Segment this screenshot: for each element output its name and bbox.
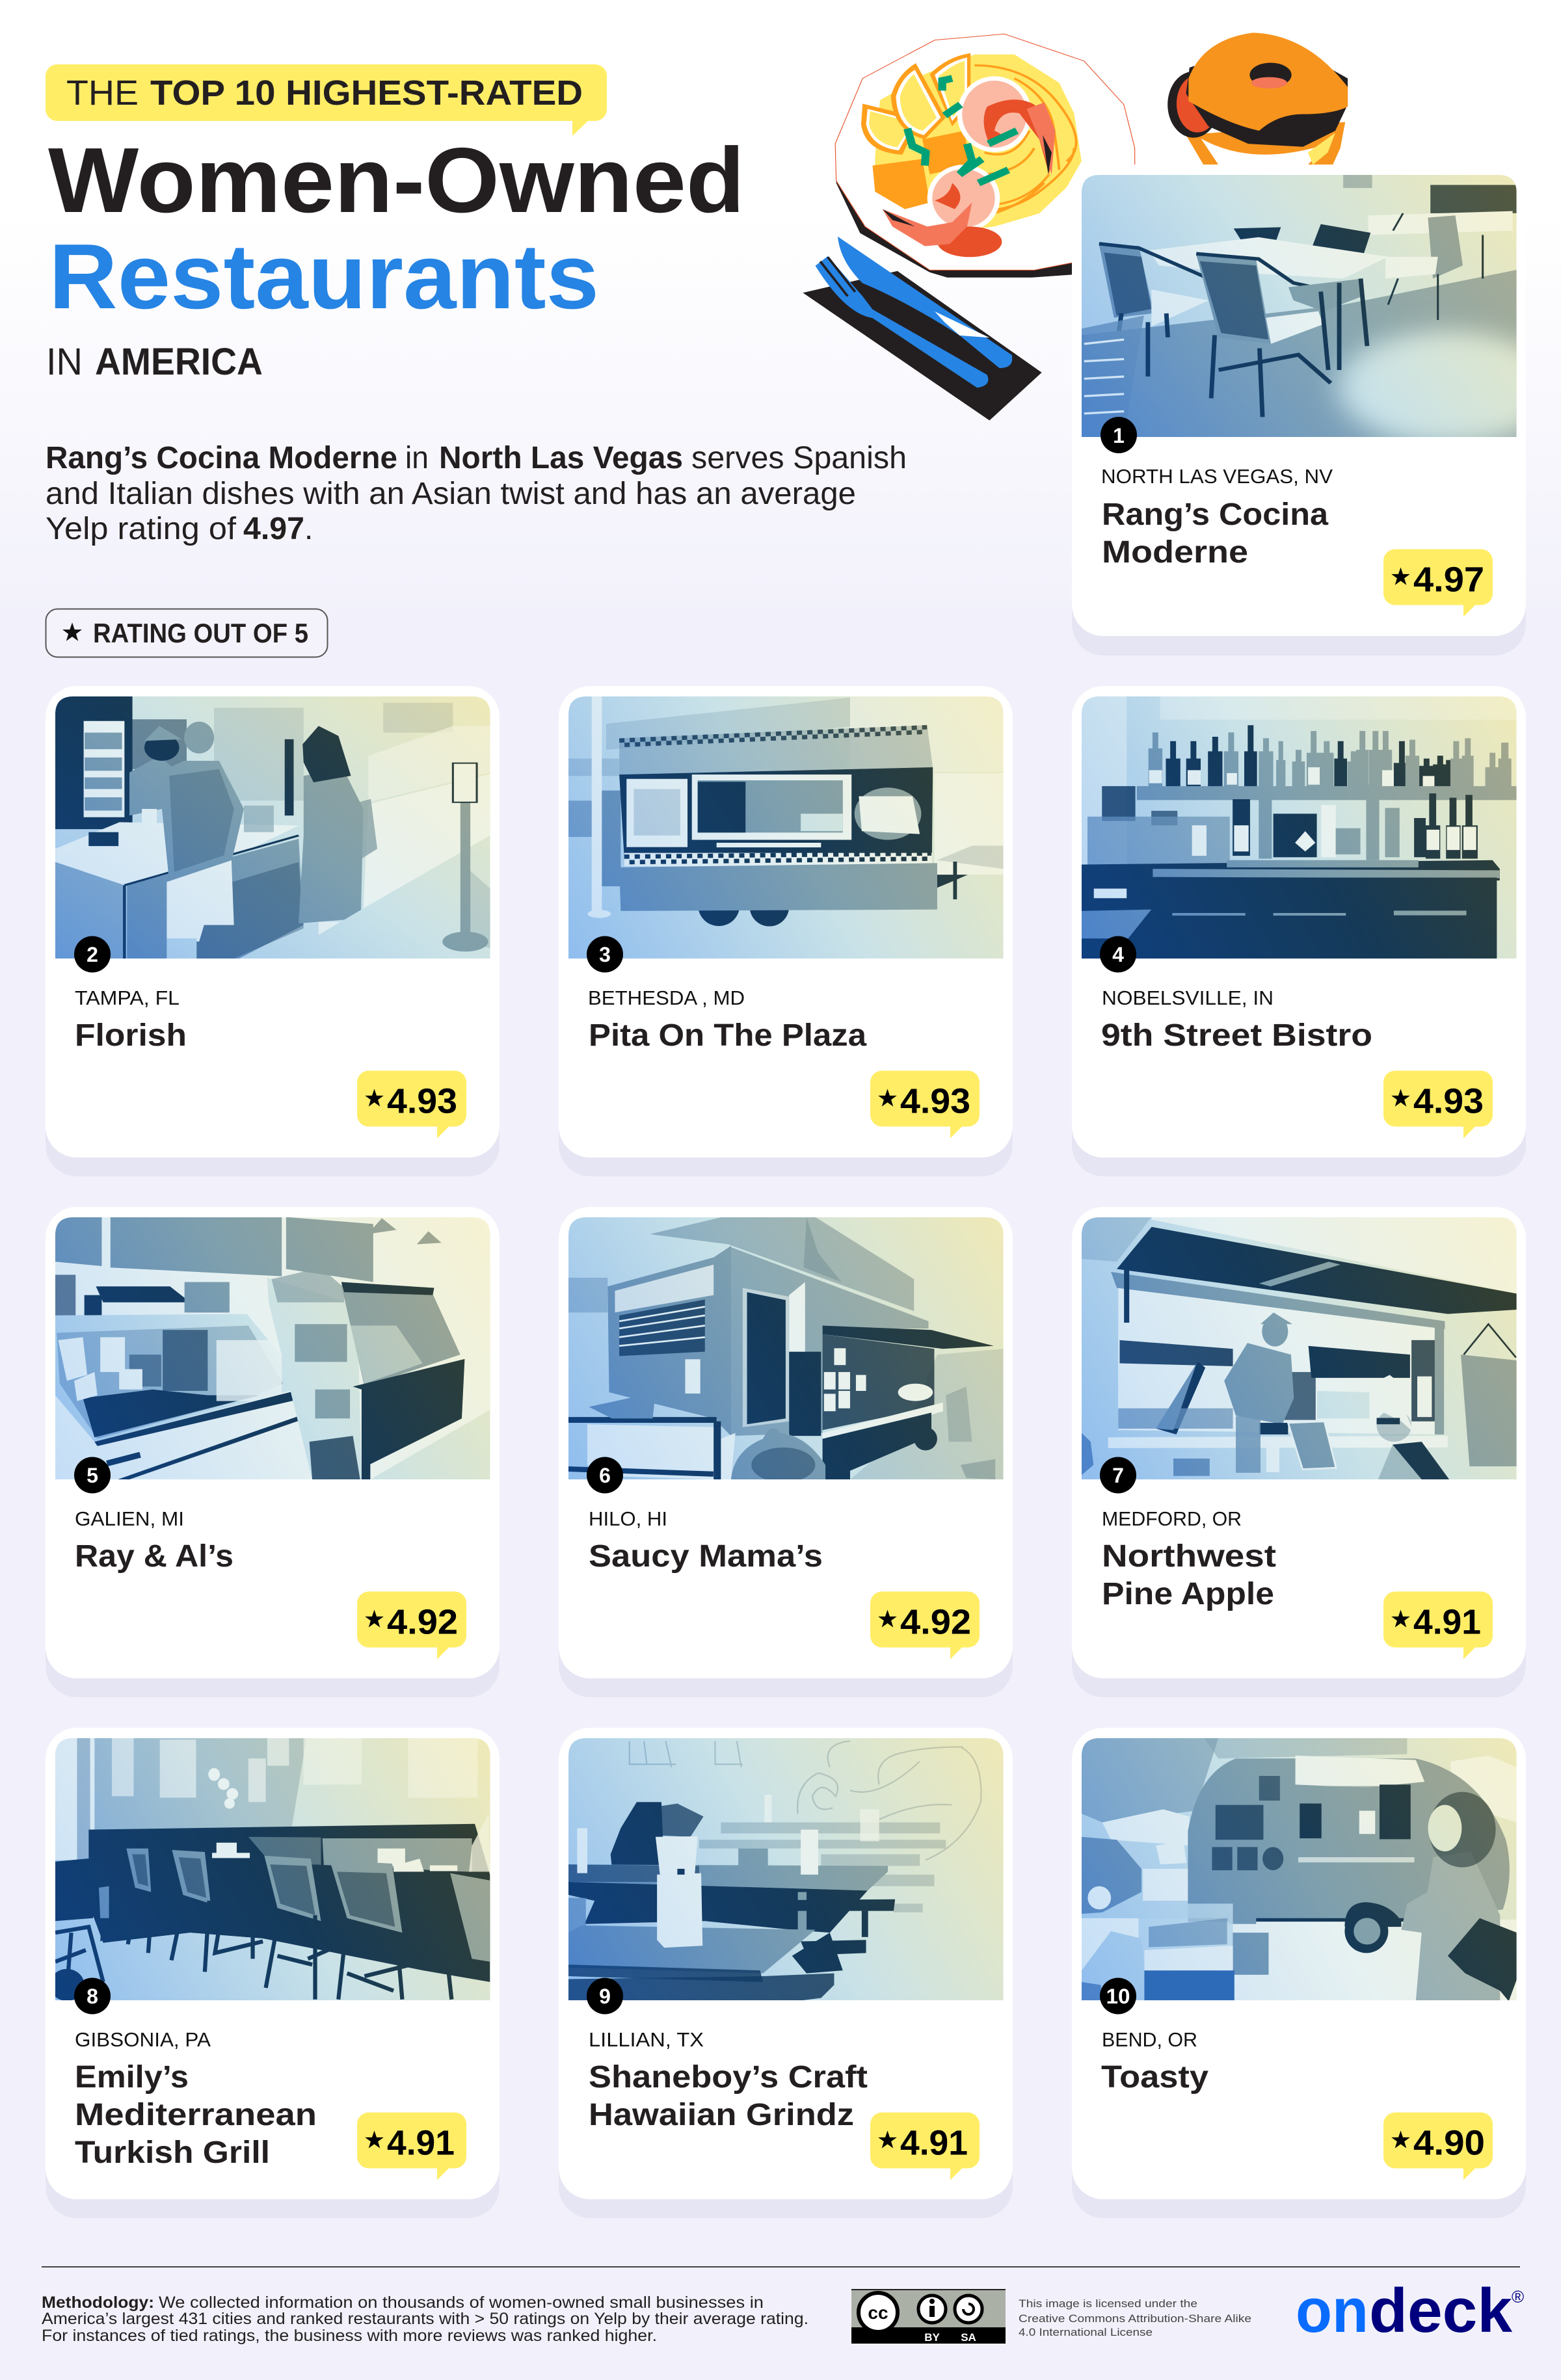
card 5: Ray & Al's <box>46 1207 500 1697</box>
restaurant name: Ray & Al’s <box>75 1539 233 1574</box>
logo: OnDeck <box>1296 2276 1524 2346</box>
rank badge 6: 6 <box>599 1464 611 1487</box>
rating bubble: 4.90 <box>1413 2124 1485 2163</box>
rating bubble <box>1383 2112 1493 2180</box>
photo: staff at truck window <box>1082 1217 1517 1480</box>
card panel <box>1072 1207 1526 1697</box>
photo: trailer, beer mug and woman <box>1082 1737 1517 2001</box>
photo: dining room <box>1082 175 1517 437</box>
photo: deli display <box>54 1217 492 1480</box>
card panel <box>559 686 1013 1176</box>
icon: Creative Commons BY-SA badge <box>851 2289 1006 2344</box>
rating bubble <box>357 2112 466 2180</box>
card 2: Florish <box>46 686 500 1176</box>
rank badge 10: 10 <box>1106 1985 1130 2008</box>
header: eyebrow pill: TOP 10 HIGHEST-RATED <box>150 73 583 112</box>
location: MEDFORD, OR <box>1102 1507 1242 1530</box>
license text: Creative Commons Attribution-Share Alike <box>1019 2313 1251 2325</box>
rank badge 7: 7 <box>1112 1464 1124 1487</box>
rating bubble: 4.91 <box>1413 1602 1481 1641</box>
location: TAMPA, FL <box>75 986 180 1009</box>
intro paragraph <box>46 441 907 546</box>
illustration: pasta plate, cutlery and bagel <box>803 33 1348 421</box>
methodology note: America’s largest 431 cities and ranked restaurants with > 50 ratings on Yelp by their average rating. <box>42 2310 808 2328</box>
rating bubble: 4.91 <box>387 2124 455 2163</box>
restaurant name <box>75 2060 317 2170</box>
restaurant name: 9th Street Bistro <box>1101 1018 1372 1053</box>
card 8: Emily's Mediterranean Turkish Grill <box>46 1728 500 2218</box>
location: LILLIAN, TX <box>589 2028 704 2051</box>
rank badge 5 <box>74 1457 111 1493</box>
header: eyebrow pill: THE <box>66 73 139 112</box>
photo: picnic tables <box>568 1737 1004 2001</box>
rating bubble <box>357 1070 466 1138</box>
methodology note <box>42 2294 808 2345</box>
restaurant name: Hawaiian Grindz <box>589 2098 854 2132</box>
methodology note: For instances of tied ratings, the business with more reviews was ranked higher. <box>42 2327 657 2345</box>
rating bubble <box>870 1070 980 1138</box>
rank badge 9 <box>587 1978 623 2015</box>
rating bubble <box>357 1592 466 1659</box>
title: Restaurants <box>49 225 599 328</box>
intro paragraph: . <box>304 512 313 546</box>
rating bubble: 4.93 <box>1413 1082 1484 1121</box>
rating bubble <box>1383 1592 1493 1659</box>
icon: Creative Commons BY-SA badge: SA <box>961 2331 976 2344</box>
restaurant name: Toasty <box>1101 2060 1208 2095</box>
rank badge 4 <box>1100 936 1136 973</box>
location: NORTH LAS VEGAS, NV <box>1101 465 1333 488</box>
header: eyebrow pill <box>46 64 607 136</box>
photo: food truck <box>568 696 1004 959</box>
restaurant name: Turkish Grill <box>75 2135 270 2170</box>
restaurant name: Shaneboy’s Craft <box>589 2060 868 2095</box>
legend: rating out of 5 <box>46 609 328 657</box>
intro paragraph: Yelp rating of <box>46 512 237 546</box>
restaurant name: Florish <box>75 1018 187 1053</box>
rating bubble: 4.91 <box>900 2124 968 2163</box>
rank badge 4: 4 <box>1112 943 1124 966</box>
card panel <box>559 1207 1013 1697</box>
intro paragraph: and Italian dishes with an Asian twist and has an average <box>46 477 856 511</box>
license text <box>1019 2298 1251 2338</box>
rank badge 3 <box>587 936 623 973</box>
rank badge 8 <box>74 1978 111 2015</box>
legend: rating out of 5: RATING OUT OF 5 <box>93 618 308 648</box>
icon: bagel sandwich <box>1167 33 1348 165</box>
rank badge 10 <box>1100 1978 1136 2015</box>
card panel <box>559 1728 1013 2218</box>
rating bubble <box>870 2112 980 2180</box>
license text: 4.0 International License <box>1019 2327 1153 2338</box>
rank badge 8: 8 <box>87 1985 98 2008</box>
card panel <box>1072 1728 1526 2218</box>
icon: Creative Commons BY-SA badge: cc <box>868 2303 888 2323</box>
subtitle: in America: AMERICA <box>95 341 263 383</box>
card panel <box>1072 165 1526 655</box>
location: GALIEN, MI <box>75 1507 184 1530</box>
rating bubble <box>1383 549 1493 616</box>
restaurant name: Saucy Mama’s <box>589 1539 823 1574</box>
logo: OnDeck: deck <box>1369 2276 1513 2346</box>
rating bubble <box>870 1592 980 1659</box>
rank badge 2 <box>74 936 111 973</box>
intro paragraph: North Las Vegas <box>439 441 683 475</box>
location: NOBELSVILLE, IN <box>1102 986 1274 1009</box>
card panel <box>46 1728 500 2218</box>
restaurant name <box>589 2060 868 2132</box>
restaurant name: Northwest <box>1102 1539 1276 1574</box>
rank badge 1 <box>1101 417 1137 453</box>
card 9: Shaneboy's Craft Hawaiian Grindz <box>559 1728 1013 2218</box>
location: HILO, HI <box>589 1507 667 1530</box>
restaurant name: Moderne <box>1102 535 1248 570</box>
rating bubble: 4.93 <box>387 1082 457 1121</box>
photo: dining room with chairs <box>49 1737 492 2001</box>
restaurant name: Emily’s <box>75 2060 189 2095</box>
restaurant name <box>1102 1539 1276 1611</box>
location: BEND, OR <box>1102 2028 1197 2051</box>
card 3: Pita On The Plaza <box>559 686 1013 1176</box>
rank badge 6 <box>587 1457 623 1493</box>
restaurant name: Rang’s Cocina <box>1102 497 1328 532</box>
icon: plate <box>835 34 1135 278</box>
card panel <box>1072 686 1526 1176</box>
logo: OnDeck: ® <box>1512 2287 1524 2307</box>
icon: Creative Commons BY-SA badge: BY <box>924 2331 940 2344</box>
rating bubble: 4.92 <box>387 1602 458 1641</box>
card panel <box>46 1207 500 1697</box>
restaurant name: Pine Apple <box>1102 1577 1274 1611</box>
card 10: Toasty <box>1072 1728 1526 2218</box>
card 4: 9th Street Bistro <box>1072 686 1526 1176</box>
card 7: Northwest Pine Apple <box>1072 1207 1526 1697</box>
logo: OnDeck: on <box>1296 2276 1368 2346</box>
title: Women-Owned <box>48 129 745 232</box>
photo: bar with bottles <box>1082 696 1517 959</box>
rating bubble: 4.92 <box>900 1602 971 1641</box>
rank badge 7 <box>1100 1457 1136 1493</box>
subtitle: in America: IN <box>46 341 83 383</box>
rank badge 3: 3 <box>599 943 611 966</box>
restaurant name <box>1102 497 1328 570</box>
restaurant name: Mediterranean <box>75 2098 317 2132</box>
photo: food truck with awning <box>568 1217 1004 1483</box>
intro paragraph: in <box>405 441 429 475</box>
card 1: Rang's Cocina Moderne <box>1072 165 1558 655</box>
rank badge 1: 1 <box>1113 424 1125 447</box>
intro paragraph: 4.97 <box>243 512 304 546</box>
rating bubble <box>1383 1070 1493 1138</box>
intro paragraph: Rang’s Cocina Moderne <box>46 441 397 475</box>
location: BETHESDA , MD <box>588 986 745 1009</box>
location: GIBSONIA, PA <box>75 2028 211 2051</box>
intro paragraph: serves Spanish <box>691 441 907 475</box>
restaurant name: Pita On The Plaza <box>589 1018 866 1053</box>
license text: This image is licensed under the <box>1019 2298 1197 2310</box>
photo: customers at counter <box>55 696 490 959</box>
methodology note: We collected information on thousands of women-owned small businesses in <box>159 2294 764 2312</box>
card panel <box>46 686 500 1176</box>
title <box>48 129 745 328</box>
card 6: Saucy Mama's <box>559 1207 1013 1697</box>
rating bubble: 4.97 <box>1413 561 1484 600</box>
rating bubble: 4.93 <box>900 1082 970 1121</box>
icon: cutlery on placemat <box>803 237 1042 421</box>
rank badge 2: 2 <box>87 943 98 966</box>
rank badge 5: 5 <box>87 1464 98 1487</box>
methodology note: Methodology: <box>42 2294 154 2312</box>
rank badge 9: 9 <box>599 1985 611 2008</box>
